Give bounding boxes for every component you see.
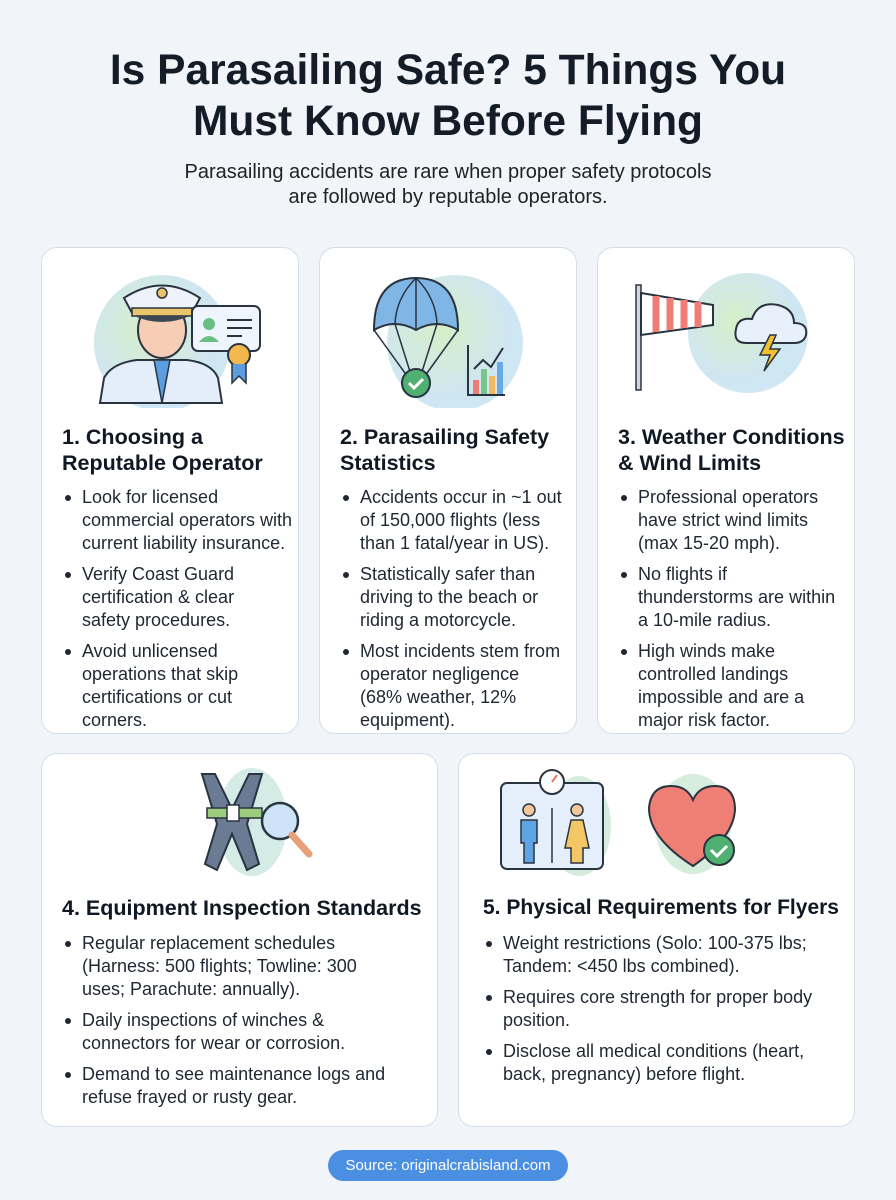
bullets: Demand to see maintenance logs and [82, 1064, 385, 1084]
bullets [343, 487, 562, 730]
bullets [486, 933, 812, 1084]
panel: operator [41, 247, 299, 734]
bullets: Look for licensed [82, 487, 218, 507]
bullets: Professional operators [638, 487, 818, 507]
bullets: Disclose all medical conditions (heart, [503, 1041, 804, 1061]
heading: & Wind Limits [618, 451, 761, 475]
bullets: connectors for wear or corrosion. [82, 1033, 345, 1053]
bullets: Tandem: <450 lbs combined). [503, 956, 740, 976]
icon: captain with license [94, 275, 261, 408]
bullets [621, 487, 835, 730]
panel: statistics [319, 247, 577, 734]
bullets: major risk factor. [638, 710, 770, 730]
title: Is Parasailing Safe? 5 Things You [110, 47, 786, 94]
panel: physical [458, 753, 855, 1127]
bullets: Regular replacement schedules [82, 933, 335, 953]
bullets: High winds make [638, 641, 775, 661]
bullets: of 150,000 flights (less [360, 510, 540, 530]
bullets: (Harness: 500 flights; Towline: 300 [82, 956, 357, 976]
heading [618, 425, 845, 475]
bullets: back, pregnancy) before flight. [503, 1064, 745, 1084]
heading [62, 425, 263, 475]
bullets: equipment). [360, 710, 455, 730]
title [110, 47, 786, 145]
bullets: commercial operators with [82, 510, 292, 530]
heading: Reputable Operator [62, 451, 263, 475]
source pill [328, 1150, 568, 1181]
bullets: operator negligence [360, 664, 519, 684]
bullets: Statistically safer than [360, 564, 535, 584]
source pill: Source: originalcrabisland.com [345, 1157, 551, 1174]
heading: 3. Weather Conditions [618, 425, 845, 449]
bullets: certifications or cut [82, 687, 232, 707]
bullets: No flights if [638, 564, 727, 584]
icon: harness and magnifier [200, 768, 312, 876]
bullets: Most incidents stem from [360, 641, 560, 661]
heading: 1. Choosing a [62, 425, 203, 449]
panel: equipment [41, 753, 438, 1127]
bullets [65, 487, 292, 730]
bullets: refuse frayed or rusty gear. [82, 1087, 297, 1107]
bullets: Daily inspections of winches & [82, 1010, 324, 1030]
panel: weather [597, 247, 855, 734]
subtitle [185, 161, 711, 208]
bullets: current liability insurance. [82, 533, 285, 553]
subtitle: Parasailing accidents are rare when proper safety protocols [185, 161, 711, 183]
bullets: (68% weather, 12% [360, 687, 516, 707]
bullets: have strict wind limits [638, 510, 808, 530]
bullets: thunderstorms are within [638, 587, 835, 607]
heading: 5. Physical Requirements for Flyers [483, 896, 839, 919]
title: Must Know Before Flying [193, 98, 703, 145]
bullets: than 1 fatal/year in US). [360, 533, 549, 553]
bullets: (max 15-20 mph). [638, 533, 780, 553]
bullets: a 10-mile radius. [638, 610, 771, 630]
bullets: operations that skip [82, 664, 238, 684]
heading: 2. Parasailing Safety [340, 425, 549, 449]
bullets: corners. [82, 710, 147, 730]
icon: parachute with chart [373, 275, 523, 408]
bullets: certification & clear [82, 587, 234, 607]
bullets: Verify Coast Guard [82, 564, 234, 584]
heading: 4. Equipment Inspection Standards [62, 896, 422, 920]
bullets: safety procedures. [82, 610, 230, 630]
bullets: Weight restrictions (Solo: 100-375 lbs; [503, 933, 807, 953]
bullets: riding a motorcycle. [360, 610, 516, 630]
bullets: driving to the beach or [360, 587, 538, 607]
bullets: Requires core strength for proper body [503, 987, 812, 1007]
icon: windsock and storm cloud [635, 273, 808, 393]
bullets: controlled landings [638, 664, 788, 684]
subtitle: are followed by reputable operators. [288, 186, 608, 208]
bullets: uses; Parachute: annually). [82, 979, 300, 999]
bullets: impossible and are a [638, 687, 804, 707]
bullets [65, 933, 385, 1107]
bullets: position. [503, 1010, 570, 1030]
bullets: Avoid unlicensed [82, 641, 218, 661]
heading [340, 425, 549, 475]
bullets: Accidents occur in ~1 out [360, 487, 562, 507]
heading: Statistics [340, 451, 436, 475]
icon: scale with people and heart [500, 769, 736, 876]
